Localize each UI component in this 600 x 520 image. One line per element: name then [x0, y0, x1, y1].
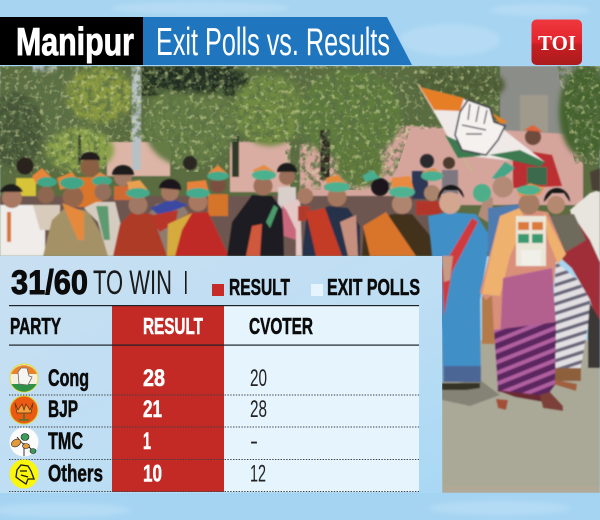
- person: orange saree: [362, 168, 444, 256]
- subtitle: Exit Polls vs. Results: Exit Polls vs. Results: [156, 21, 390, 64]
- result column: [112, 305, 224, 492]
- title: Manipur: Manipur: [16, 21, 134, 64]
- column header: party: PARTY: [10, 313, 61, 339]
- icon: others emblem: [10, 460, 38, 488]
- column header: result: RESULT: [143, 313, 203, 339]
- panel: results table: [0, 256, 442, 493]
- logo: TOI: TOI: [538, 31, 576, 55]
- heading: majority mark: [11, 264, 187, 302]
- person: black shawl: [227, 165, 297, 256]
- row: Cong: 28: [143, 365, 165, 392]
- person: red saree yellow blouse: [167, 180, 229, 256]
- icon: Congress hand: [10, 364, 38, 392]
- person: red saree orange shoulder: [302, 175, 360, 256]
- person: red saree left: [113, 180, 167, 256]
- person: main woman in purple skirt: [480, 183, 566, 411]
- column header: cvoter: CVOTER: [249, 313, 313, 339]
- person: white shirt between: [284, 188, 313, 256]
- icon: TMC flowers: [10, 428, 38, 456]
- row: Others: [10, 460, 266, 488]
- logo: TOI: [532, 20, 582, 65]
- person: white kurta: [0, 184, 45, 256]
- exit poll column: [224, 305, 419, 492]
- person: grey striped skirt: [552, 262, 590, 391]
- row: TMC: -: [250, 428, 258, 455]
- heading: majority mark: TO WIN: [93, 264, 172, 302]
- leaf texture: [0, 66, 600, 196]
- row: BJP: 28: [250, 396, 267, 423]
- row: Cong: Cong: [48, 365, 89, 392]
- row: BJP: [10, 396, 267, 424]
- row: Cong: 20: [250, 365, 267, 392]
- row: Others: Others: [48, 460, 103, 488]
- row: TMC: TMC: [48, 428, 83, 455]
- person: blue saree: [428, 185, 490, 390]
- photo background: trees and wall: [0, 66, 600, 256]
- heading: majority mark: 31/60: [11, 264, 88, 302]
- title banner: [0, 17, 412, 65]
- row: TMC: [10, 428, 258, 456]
- person: white blouse cap: [84, 172, 122, 256]
- row: BJP: 21: [143, 396, 162, 423]
- icon: BJP lotus: [10, 396, 38, 424]
- legend: result: [212, 274, 290, 300]
- row: Cong: [10, 364, 267, 392]
- row: Others: 12: [250, 460, 266, 488]
- person: woman in blue and grey: [148, 179, 188, 256]
- person: blue arm raised woman: [473, 162, 520, 256]
- person: tan shawl: [43, 172, 110, 256]
- row: TMC: 1: [143, 428, 151, 455]
- row: BJP: BJP: [48, 396, 78, 423]
- legend: exit polls: EXIT POLLS: [327, 274, 420, 300]
- person: patterned woman and white shirt right: [544, 168, 600, 368]
- legend: result: RESULT: [229, 274, 290, 300]
- crowd back row: [0, 125, 562, 256]
- road: [442, 340, 600, 493]
- row: Others: 10: [143, 460, 162, 488]
- legend: exit polls: [311, 274, 420, 300]
- person: cap woman white blouse: [32, 168, 60, 230]
- flag: Congress party flag: [418, 84, 545, 172]
